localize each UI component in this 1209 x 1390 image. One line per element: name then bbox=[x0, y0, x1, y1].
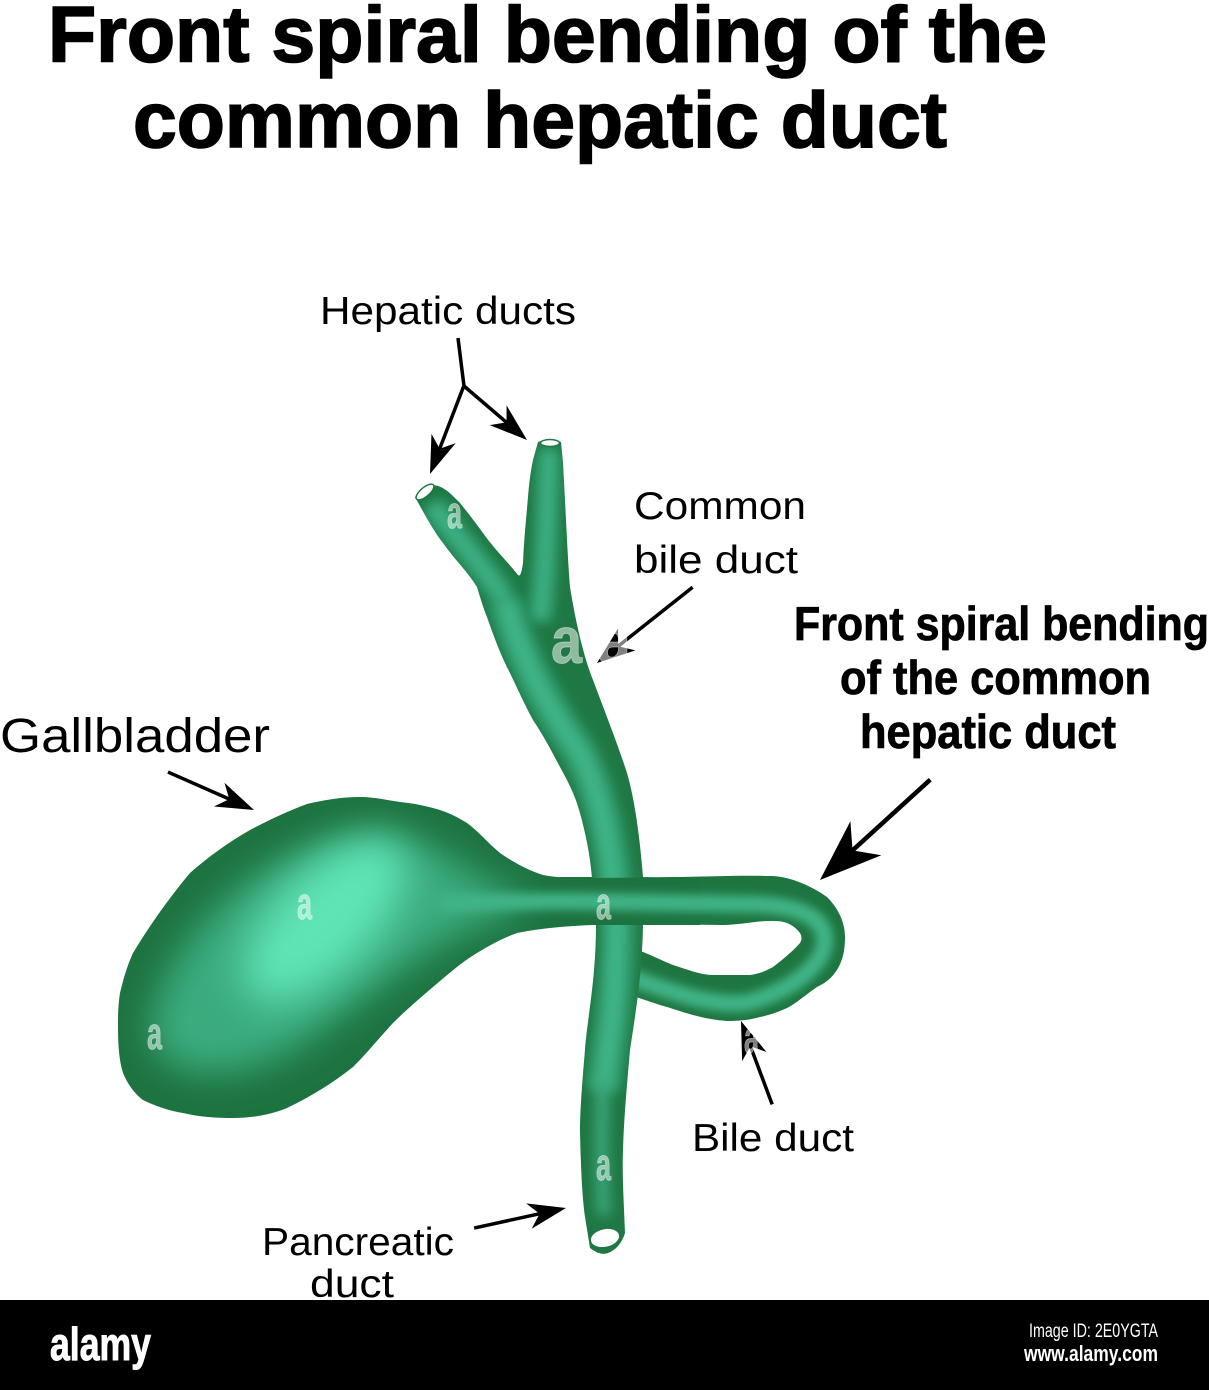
gallbladder and cystic duct bbox=[118, 797, 700, 1118]
label: common bile duct: Common bbox=[634, 485, 806, 528]
illustration: biliary system bbox=[118, 440, 845, 1254]
watermark glyphs: a bbox=[297, 878, 313, 929]
vertical common duct bbox=[415, 440, 643, 1254]
watermark glyphs: a bbox=[744, 1012, 760, 1063]
lower strand of the bile duct loop bbox=[560, 876, 845, 1021]
image id: Image ID: 2E0YGTA bbox=[1029, 1321, 1158, 1342]
label: front spiral bending: hepatic duct bbox=[860, 705, 1116, 758]
watermark glyphs: a bbox=[596, 1139, 612, 1190]
footer bar bbox=[0, 1300, 1209, 1390]
watermark glyphs: a bbox=[447, 487, 463, 538]
watermark glyphs: a bbox=[596, 878, 612, 929]
label: front spiral bending bbox=[794, 597, 1209, 758]
label: front spiral bending: of the common bbox=[840, 651, 1151, 704]
title: common hepatic duct bbox=[133, 75, 947, 164]
watermark glyphs bbox=[147, 487, 760, 1190]
watermark glyphs: a bbox=[597, 603, 632, 677]
label: common bile duct bbox=[634, 485, 806, 582]
label: pancreatic duct bbox=[262, 1221, 454, 1306]
arrow: bile duct bbox=[729, 1016, 784, 1109]
label: bile duct: Bile duct bbox=[692, 1117, 854, 1160]
arrow: hepatic ducts bbox=[418, 338, 535, 479]
label: pancreatic duct: duct bbox=[310, 1263, 394, 1306]
arrow: pancreatic duct bbox=[471, 1195, 569, 1241]
label: common bile duct: bile duct bbox=[634, 539, 798, 582]
arrow: common bile duct bbox=[588, 576, 701, 674]
arrow: gallbladder bbox=[163, 760, 259, 822]
footer logo: alamy bbox=[50, 1318, 151, 1370]
watermark glyphs: a bbox=[147, 1008, 163, 1059]
website: www.alamy.com bbox=[1023, 1341, 1158, 1366]
watermark glyphs: a bbox=[551, 603, 583, 677]
title bbox=[48, 0, 1047, 164]
tube openings bbox=[414, 440, 622, 1250]
arrow: front spiral bending bbox=[805, 763, 946, 897]
label: gallbladder: Gallbladder bbox=[0, 710, 270, 763]
label: pancreatic duct: Pancreatic bbox=[262, 1221, 454, 1264]
label: hepatic ducts: Hepatic ducts bbox=[320, 290, 576, 333]
